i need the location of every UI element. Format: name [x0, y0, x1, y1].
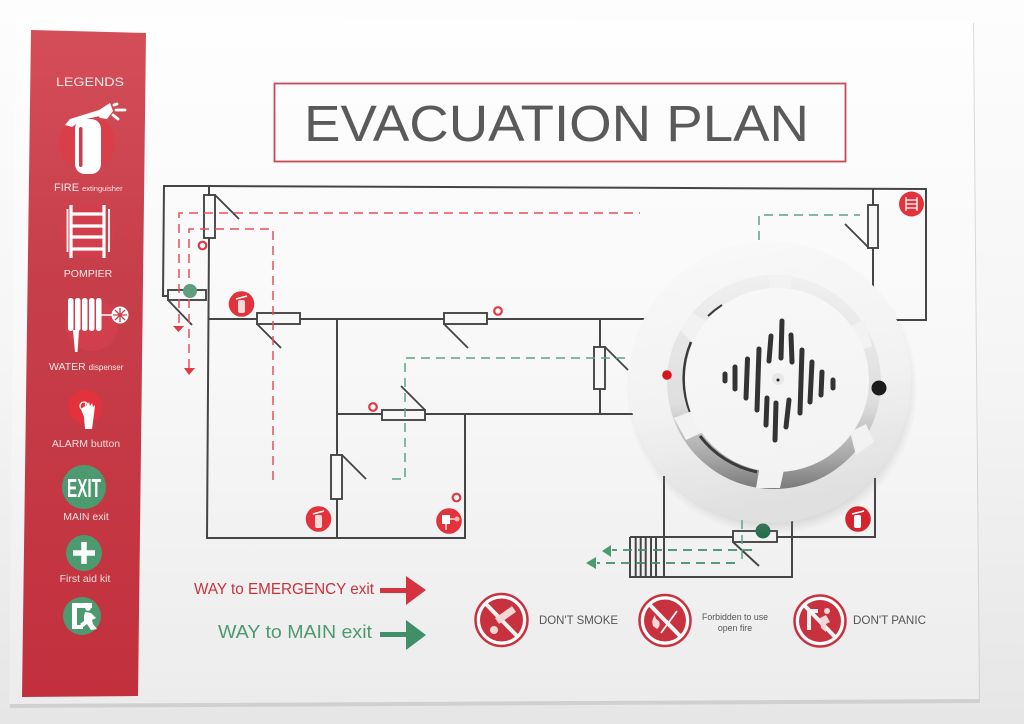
detector ribs — [674, 275, 874, 488]
icon: extinguisher marker lower — [306, 506, 331, 532]
label: no open fire: open fire — [718, 623, 752, 633]
detector center pin — [772, 373, 784, 385]
label: no open fire — [702, 612, 768, 633]
marker: green dots — [183, 284, 770, 538]
icon: water dispenser hose — [66, 298, 128, 352]
stair route: green dashed — [597, 550, 752, 563]
label: no panic: DON'T PANIC — [853, 613, 926, 627]
detector black button — [872, 380, 886, 396]
label: fire extinguisher: FIRE extinguisher — [54, 182, 123, 194]
arrow: main exit — [380, 620, 426, 650]
detector dark inner arcs — [684, 305, 757, 472]
main exit route: green dashed — [386, 215, 860, 563]
label: main exit: MAIN exit — [63, 511, 109, 523]
doors — [168, 195, 878, 566]
icon: extinguisher marker right — [845, 506, 871, 532]
smoke detector — [626, 241, 918, 535]
detector cap — [685, 288, 869, 472]
icon: no smoking — [476, 594, 528, 646]
emergency exit label: WAY to EMERGENCY exit — [194, 581, 375, 598]
label: no open fire: Forbidden to use — [702, 612, 768, 622]
icon: main exit: EXIT — [67, 473, 101, 503]
heading: legends: LEGENDS — [56, 77, 124, 89]
detector base — [629, 241, 911, 523]
icon: first aid kit — [66, 535, 102, 571]
green route arrowheads — [586, 545, 611, 569]
floor plan walls — [163, 186, 926, 577]
icon: fire extinguisher — [59, 103, 125, 174]
emergency route: red dashed — [179, 213, 640, 480]
icon: ladder marker — [899, 192, 924, 216]
icon: pompier ladder — [61, 204, 115, 258]
label: no smoking: DON'T SMOKE — [539, 613, 618, 627]
icon: extinguisher marker upper — [229, 291, 254, 317]
icon: running exit — [63, 597, 101, 635]
title: EVACUATION PLAN — [304, 95, 809, 152]
arrow: emergency exit — [380, 576, 426, 605]
red route arrowheads — [173, 326, 195, 375]
label: water dispenser: WATER dispenser — [49, 361, 124, 373]
detector grille — [725, 321, 833, 440]
icon: main exit — [62, 465, 106, 509]
label: pompier: POMPIER — [64, 268, 113, 280]
icon: no panic — [794, 596, 846, 646]
title — [274, 84, 846, 162]
main exit label: WAY to MAIN exit — [218, 622, 372, 642]
label: first aid kit: First aid kit — [60, 573, 110, 585]
label: alarm button: ALARM button — [52, 438, 120, 450]
detector red LED — [662, 370, 672, 380]
panel: legends sidebar — [22, 30, 146, 697]
alarm ring markers — [199, 242, 502, 501]
icon: alarm button — [68, 390, 102, 429]
icon: water dispenser marker — [436, 508, 462, 534]
detector vents — [667, 275, 881, 489]
icon: no open fire — [640, 595, 690, 646]
